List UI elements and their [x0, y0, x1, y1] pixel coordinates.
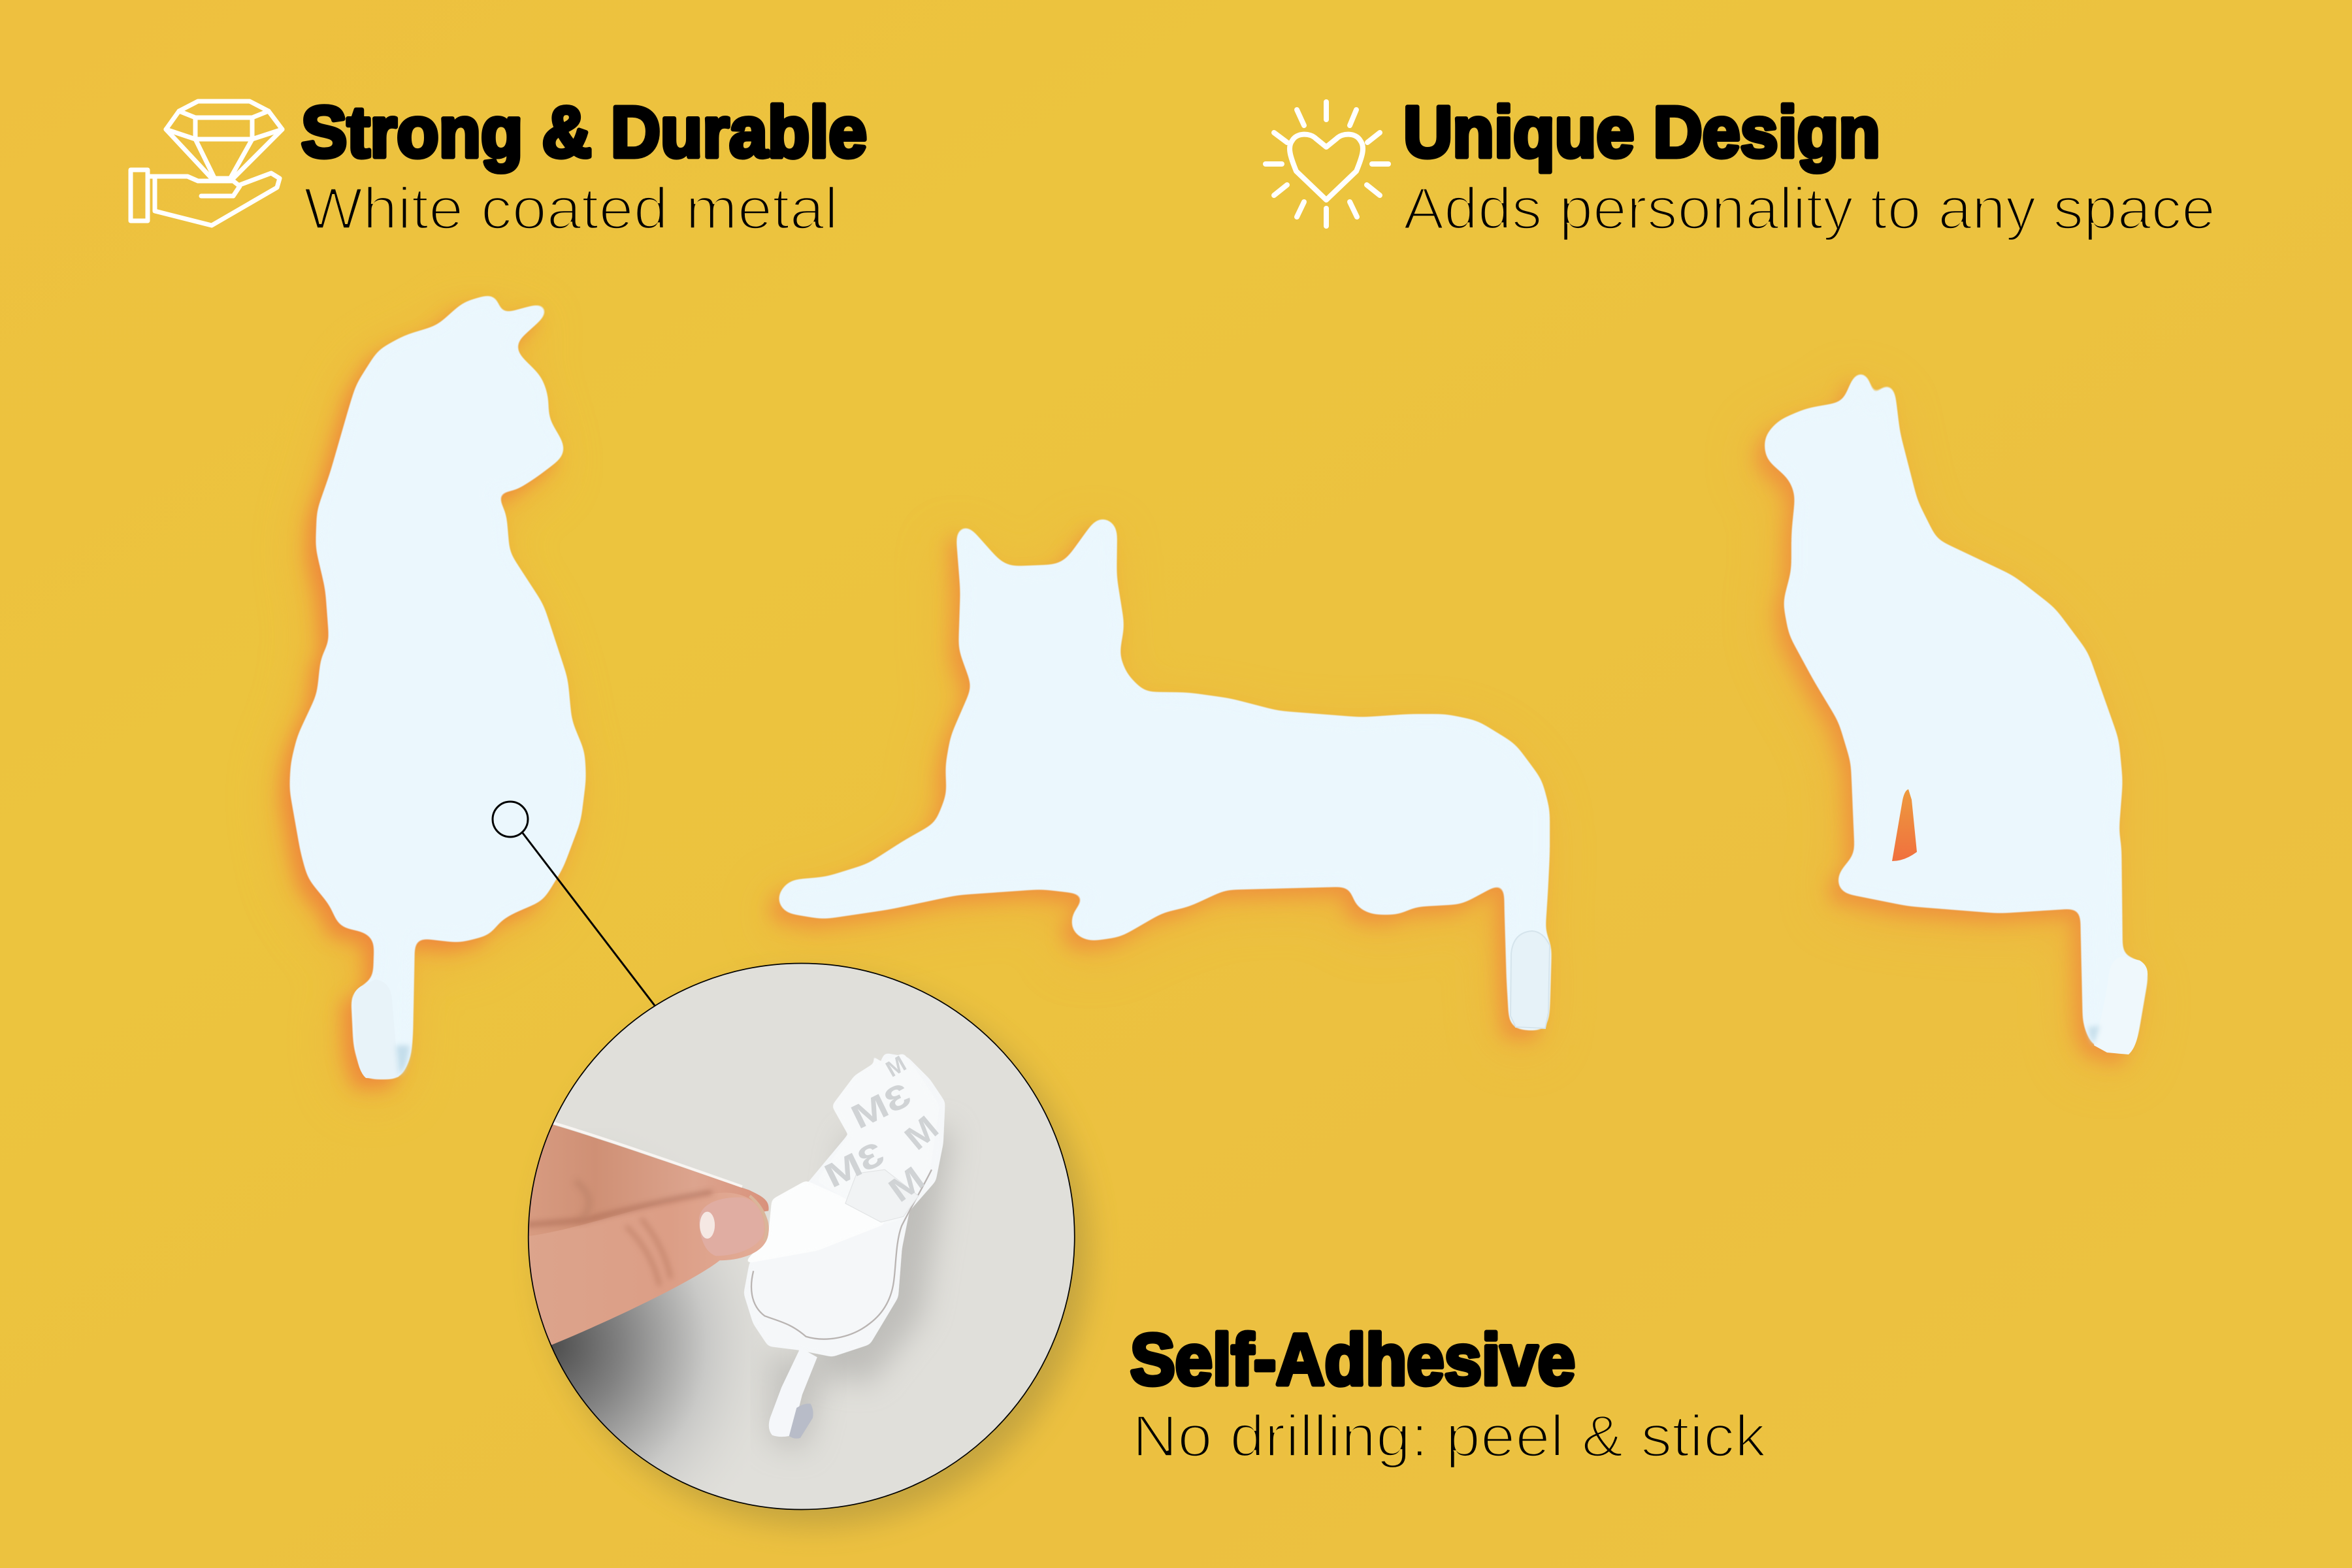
- text: No drilling: peel & stick: No drilling: peel & stick: [1132, 1404, 1767, 1469]
- icon: diamond in hand: [131, 101, 282, 225]
- cat hook: lying down: [768, 518, 1550, 1045]
- cat hook: sitting, looking up-left: [1756, 370, 2148, 1070]
- text: Adds personality to any space: Adds personality to any space: [1403, 176, 2215, 242]
- icon: heart with sun rays: [1266, 102, 1388, 226]
- cat hook: sitting, looking right: [280, 294, 585, 1094]
- text: White coated metal: White coated metal: [304, 176, 838, 242]
- photo panel: peeling adhesive: [510, 963, 1089, 1541]
- callout marker and connector line: [493, 802, 655, 1005]
- peeled film with 3M marks: M: [882, 1159, 932, 1210]
- heading: Self-Adhesive: Self-Adhesive: [1130, 1320, 1575, 1400]
- adhesive hook back: [744, 1053, 945, 1439]
- peeled film with 3M marks: M: [898, 1109, 945, 1157]
- heading: Strong & Durable: Strong & Durable: [301, 92, 867, 172]
- peeled film with 3M marks: M: [882, 1051, 911, 1082]
- heading: Unique Design: Unique Design: [1403, 92, 1880, 172]
- fingers: [521, 1117, 769, 1350]
- peeled film with 3M marks: 3M: [845, 1075, 917, 1136]
- peeled film with 3M marks: [744, 1050, 945, 1264]
- peeled film with 3M marks: 3M: [819, 1134, 890, 1195]
